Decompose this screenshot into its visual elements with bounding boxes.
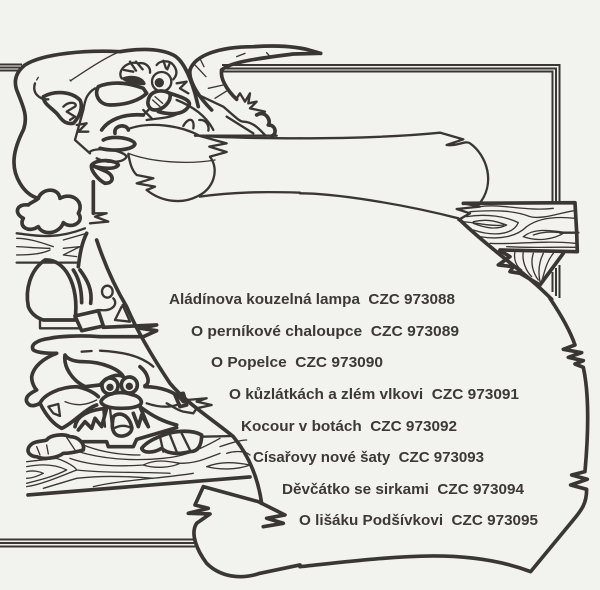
gnome cheek and side lines [75,88,95,153]
title 4: O kůzlátkách a zlém vlkovi CZC 973091 [229,386,519,403]
upper wood plank [17,228,87,267]
snout [148,91,189,114]
chin and arm [83,428,177,447]
gnome inner ear [63,103,76,120]
thumb [115,126,128,133]
wrist and fingers [167,393,212,413]
plank underside [498,251,563,285]
gnome hat [14,49,198,198]
triple-line frame [0,64,560,546]
hat fringe [100,325,157,337]
title 2: O perníkové chaloupce CZC 973089 [191,323,459,340]
face cheek [97,83,147,105]
upper gnome face and curled horn [97,46,321,136]
horn curled tail [190,46,321,136]
hat band [26,336,100,406]
hat pompom [17,190,80,233]
gnome hand [90,138,135,223]
title 5: Kocour v botách CZC 973092 [241,418,457,435]
hair curls [120,61,188,93]
lower gnome face [26,336,250,495]
title 7: Děvčátko se sirkami CZC 973094 [282,481,525,498]
ear and cheek [40,387,183,428]
arm arch over scroll [102,115,143,130]
gnome ear [43,93,81,124]
nose [101,393,141,408]
title 1: Aládínova kouzelná lampa CZC 973088 [169,291,455,308]
list of titles [169,291,538,529]
striped hat tip [27,260,130,328]
moustache [143,100,213,131]
hair [65,355,123,387]
title 6: Císařovy nové šaty CZC 973093 [253,449,484,466]
title 8: O lišáku Podšívkovi CZC 973095 [299,512,538,529]
title 3: O Popelce CZC 973090 [211,354,383,371]
hair right [140,367,148,386]
lower gnome [27,260,157,337]
right eye [152,72,171,91]
right hand [142,431,202,453]
collar tag [75,311,103,331]
left eye [121,76,146,85]
right wood plank [457,203,578,285]
hat inner curve [82,351,153,367]
left hand [28,435,84,458]
eyes [102,377,137,394]
parchment scroll outline [97,125,588,577]
beard and mouth [75,407,177,436]
lower wood plank [27,436,250,495]
upper gnome with hat [14,49,198,267]
